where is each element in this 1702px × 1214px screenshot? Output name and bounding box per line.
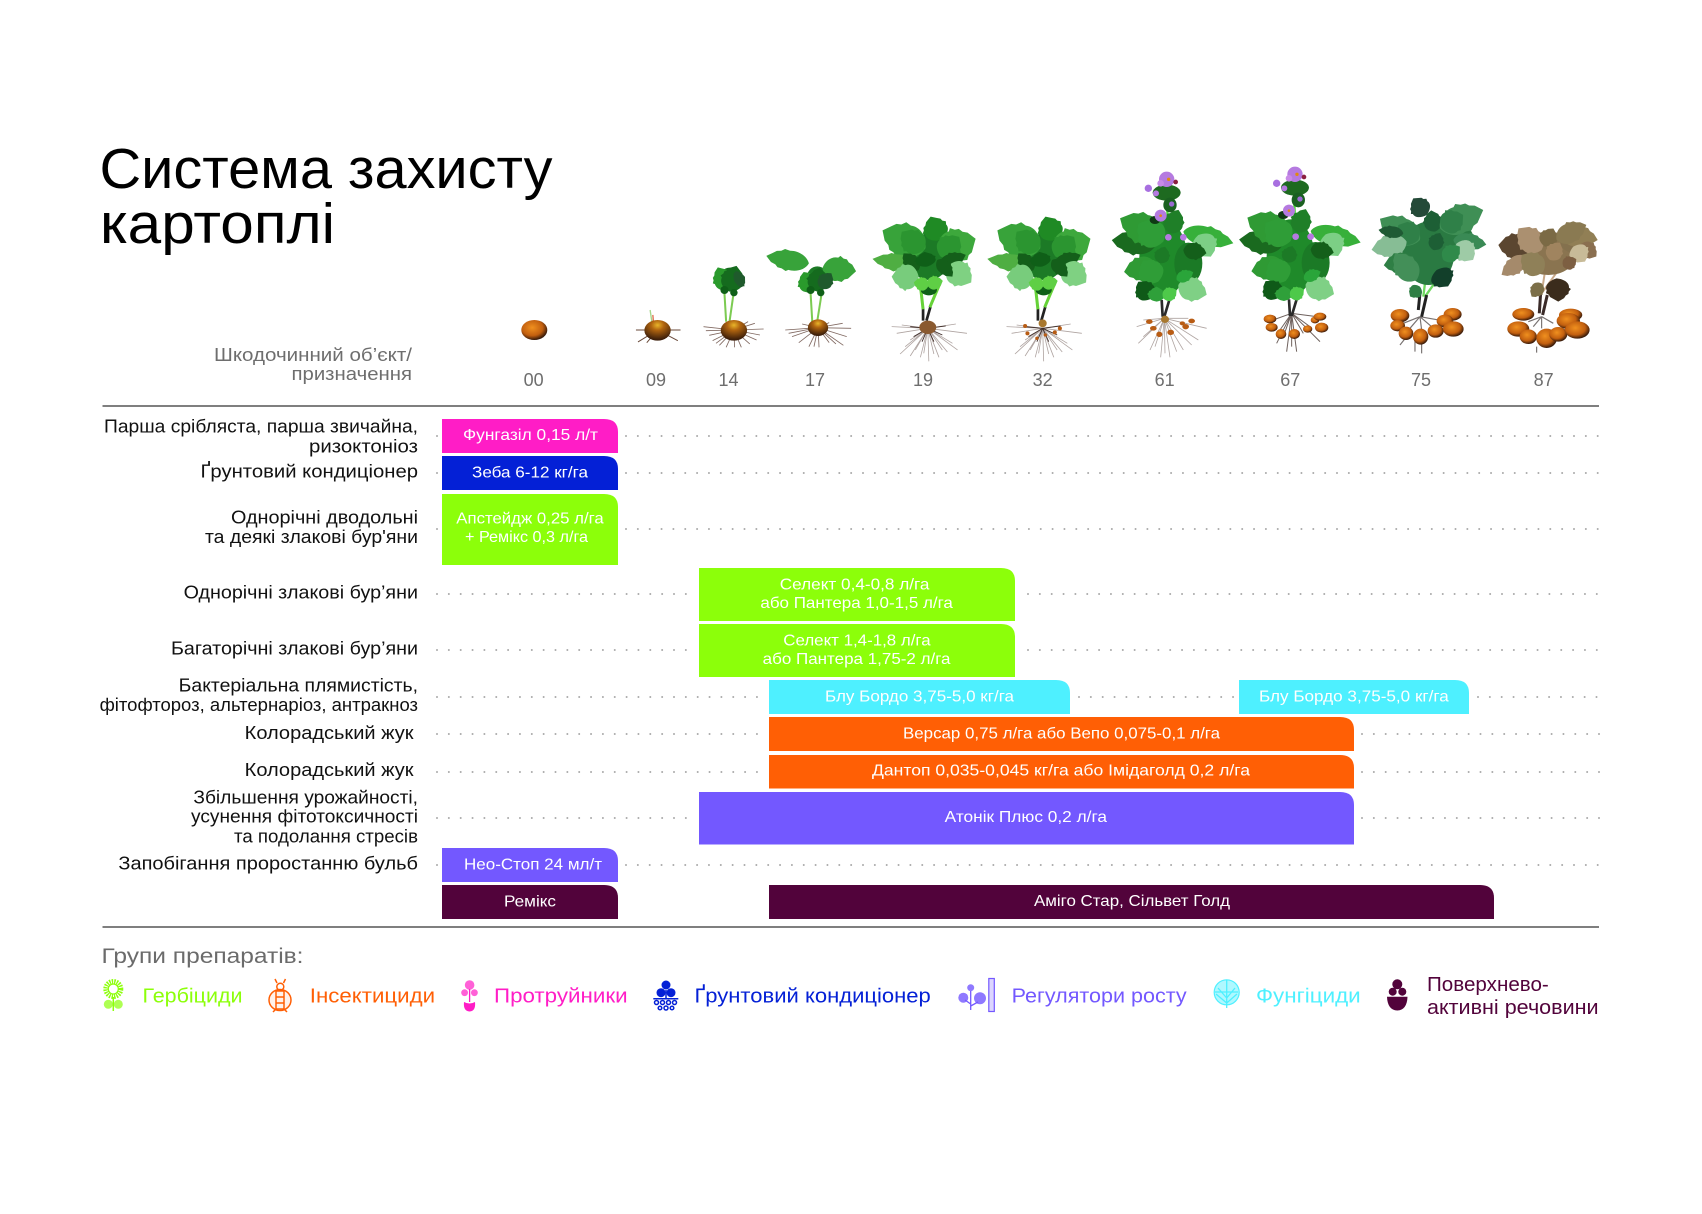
legend item: fungicides: Фунгіциди <box>1256 985 1361 1007</box>
stage numbers: 00 <box>524 370 544 390</box>
bar: Upstage plus Remix: + Ремікс 0,3 л/га <box>465 529 588 546</box>
legend item: surfactants: Поверхнево- <box>1427 974 1549 996</box>
legend heading: Групи препаратів: <box>102 944 304 968</box>
icon: plant in bowl <box>1387 979 1408 1010</box>
icon: tree <box>1214 980 1239 1008</box>
label: perennial grasses: Багаторічні злакові бур’яни <box>171 639 418 659</box>
label: yield and stress <box>191 787 418 846</box>
bar: Blu Bordo second: Блу Бордо 3,75-5,0 кг/га <box>1259 689 1449 706</box>
plants: stages 61 to 87 <box>1111 167 1602 357</box>
stage numbers: 09 <box>646 370 666 390</box>
label: annual grasses: Однорічні злакові бур’яни <box>184 583 418 603</box>
bar: Select 1.4 <box>699 624 1015 677</box>
legend item: seed protectants: Протруйники <box>494 985 628 1007</box>
plant: stage 67 <box>1238 167 1363 352</box>
icon: sunflower <box>104 982 123 1011</box>
legend item: seed protectants <box>461 980 628 1012</box>
bar: Dantop: Дантоп 0,035-0,045 кг/га або Імідаголд 0,2 л/га <box>872 762 1250 780</box>
label: annual dicots: та деякі злакові бур'яни <box>205 527 418 547</box>
bar: Select 0.4: Селект 0,4-0,8 л/га <box>780 576 930 593</box>
label: yield and stress: та подолання стресів <box>234 826 418 846</box>
legend item: growth regulators <box>958 978 1187 1012</box>
label: annual dicots <box>205 508 418 547</box>
legend item: insecticides: Інсектициди <box>310 985 435 1007</box>
bar: Select 1.4: або Пантера 1,75-2 л/га <box>763 651 951 668</box>
bar: Select 0.4: або Пантера 1,0-1,5 л/га <box>760 595 953 612</box>
bar: Neo-Stop <box>442 848 618 882</box>
label: colorado beetle second: Колорадський жук <box>245 760 414 780</box>
bar: Neo-Stop: Нео-Стоп 24 мл/т <box>464 856 603 873</box>
plant: stage 00 tuber <box>521 320 547 340</box>
label: yield and stress: Збільшення урожайності, <box>193 787 418 807</box>
row labels: target or purpose <box>100 417 418 873</box>
label: scab and rhizoctonia <box>104 417 418 456</box>
plant: stage 75 <box>1369 192 1489 353</box>
legend item: soil conditioner: Ґрунтовий кондиціонер <box>694 984 931 1007</box>
stage numbers: 61 <box>1155 370 1175 390</box>
title <box>100 137 553 256</box>
stage numbers <box>524 370 1554 390</box>
legend item: surfactants: активні речовини <box>1427 997 1599 1019</box>
bar: Fungazil: Фунгазіл 0,15 л/т <box>463 427 599 444</box>
bar: Upstage plus Remix: Апстейдж 0,25 л/га <box>456 510 604 527</box>
stage numbers: 17 <box>805 370 825 390</box>
legend item: growth regulators: Регулятори росту <box>1012 985 1187 1007</box>
bar: Atonik Plus: Атонік Плюс 0,2 л/га <box>945 809 1107 826</box>
label: scab and rhizoctonia: Парша срібляста, парша звичайна, <box>104 417 418 437</box>
bar: Atonik Plus <box>699 792 1354 844</box>
icon: plant with ruler <box>958 978 994 1012</box>
bar: Amigo Star, Silvet Gold: Аміго Стар, Сільвет Голд <box>1034 893 1231 910</box>
bar: Blu Bordo first: Блу Бордо 3,75-5,0 кг/га <box>825 689 1014 706</box>
icon: plant in soil <box>653 980 678 1010</box>
bar: Blu Bordo second <box>1239 680 1469 714</box>
label: leaf diseases: фітофтороз, альтернаріоз, антракноз <box>100 695 418 715</box>
legend item: herbicides <box>104 982 242 1011</box>
legend item: herbicides: Гербіциди <box>142 985 242 1007</box>
bar: Select 0.4 <box>699 568 1015 621</box>
bar: Zeba: Зеба 6-12 кг/га <box>472 464 588 481</box>
label: yield and stress: усунення фітотоксичності <box>191 807 418 827</box>
axis heading: target / purpose: Шкодочинний об’єкт/ <box>214 345 412 365</box>
legend item: surfactants <box>1387 974 1599 1019</box>
label: leaf diseases: Бактеріальна плямистість, <box>179 676 418 696</box>
stage numbers: 75 <box>1411 370 1431 390</box>
treatment bars <box>442 419 1494 919</box>
legend item: insecticides <box>269 979 435 1012</box>
stage numbers: 19 <box>913 370 933 390</box>
bar: Upstage plus Remix <box>442 494 618 565</box>
stage numbers: 14 <box>718 370 739 390</box>
plant: stage 17 <box>764 246 857 347</box>
bar: Zeba <box>442 456 618 490</box>
bar: Fungazil <box>442 419 618 453</box>
legend item: fungicides <box>1214 980 1361 1008</box>
stage numbers: 67 <box>1280 370 1300 390</box>
plant: stage 32 <box>986 212 1097 361</box>
bar: Remix: Ремікс <box>504 894 556 911</box>
plant: stage 14 <box>704 263 764 347</box>
axis heading: target / purpose <box>214 345 412 384</box>
label: colorado beetle: Колорадський жук <box>245 723 414 743</box>
legend <box>102 944 1599 1019</box>
plant: stage 61 <box>1111 172 1236 357</box>
bar: Dantop <box>769 755 1354 788</box>
bar: Select 1.4: Селект 1,4-1,8 л/га <box>783 632 931 649</box>
bar: Blu Bordo first <box>769 680 1070 714</box>
label: leaf diseases <box>100 676 418 715</box>
bar: Versar: Версар 0,75 л/га або Вепо 0,075-0,1 л/га <box>903 725 1220 742</box>
stage numbers: 87 <box>1534 370 1554 390</box>
stage numbers: 32 <box>1033 370 1053 390</box>
plant: stage 19 <box>871 212 982 361</box>
plants: stages 09 to 32 <box>636 212 1097 361</box>
plant: stage 87 <box>1497 215 1602 353</box>
bar: Versar <box>769 717 1354 751</box>
title: Система захисту <box>100 137 553 201</box>
growth stage plants <box>521 167 1602 361</box>
icon: beetle <box>269 979 291 1012</box>
label: annual dicots: Однорічні дводольні <box>231 508 418 528</box>
axis heading: target / purpose: призначення <box>292 364 412 384</box>
legend item: soil conditioner <box>653 980 931 1010</box>
label: soil conditioner: Ґрунтовий кондиціонер <box>200 460 418 481</box>
icon: sprouting seed <box>461 980 478 1012</box>
label: scab and rhizoctonia: ризоктоніоз <box>309 436 418 456</box>
title: картоплі <box>100 192 335 256</box>
plant: stage 09 <box>636 310 681 343</box>
bar: Amigo Star, Silvet Gold <box>769 885 1494 919</box>
bar: Remix <box>442 885 618 919</box>
label: sprouting prevention: Запобігання проростанню бульб <box>118 853 418 873</box>
